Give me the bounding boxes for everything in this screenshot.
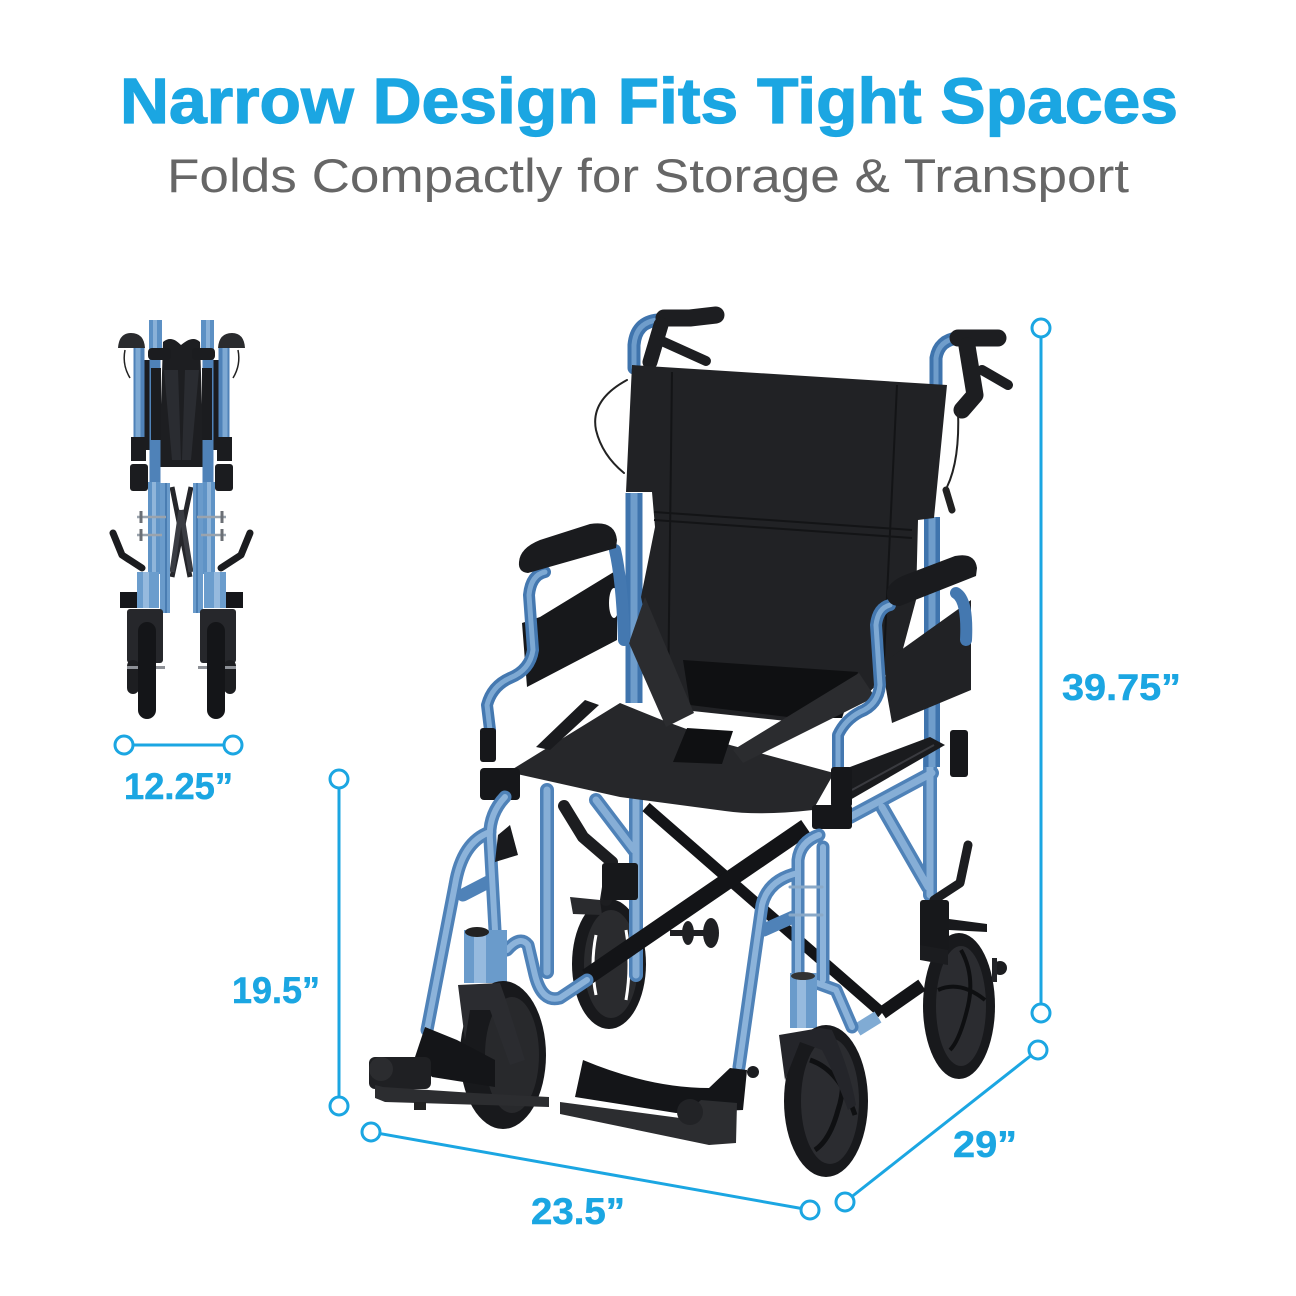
right front frame xyxy=(739,835,852,1067)
buckle xyxy=(673,728,733,764)
right brake lever xyxy=(920,845,987,965)
rear and mid frame tubes xyxy=(547,760,932,975)
subtitle: Folds Compactly for Storage & Transport xyxy=(167,149,1129,202)
dimension: width 23.5: 23.5” xyxy=(531,1191,625,1232)
rear posts under the backrest xyxy=(634,493,932,767)
wheelchair photo xyxy=(369,315,1008,1177)
rear left wheel xyxy=(572,899,646,1029)
dimension: folded width 12.25 xyxy=(115,736,242,807)
folded chair: right half xyxy=(192,320,250,719)
folded wheelchair photo xyxy=(113,320,250,719)
right footrest xyxy=(560,1060,759,1145)
arm tubes xyxy=(487,550,966,767)
handle: left xyxy=(595,315,716,473)
dimension: folded width 12.25: 12.25” xyxy=(124,766,233,807)
dimension: height 39.75: 39.75” xyxy=(1062,667,1181,708)
folding X cross bars xyxy=(587,807,922,1030)
right arm panel xyxy=(885,600,971,723)
folded chair: centre fabric and cross brace xyxy=(159,339,204,577)
dimension: height 39.75 xyxy=(1032,319,1181,1022)
seat xyxy=(508,700,834,813)
folded chair: left half xyxy=(113,320,171,719)
dimension: seat height 19.5: 19.5” xyxy=(232,970,320,1011)
gap below backrest xyxy=(705,713,796,735)
title: Narrow Design Fits Tight Spaces xyxy=(120,65,1178,137)
seat belt straps xyxy=(629,597,875,764)
backrest xyxy=(626,365,947,722)
front right wheel xyxy=(779,1025,868,1177)
left brake lever xyxy=(564,806,638,915)
rear right wheel xyxy=(923,933,1007,1079)
right armrest pad xyxy=(887,555,977,606)
seat brackets xyxy=(480,728,968,829)
dimension: width 23.5 xyxy=(362,1123,819,1232)
centre knobs xyxy=(670,918,719,948)
front left wheel xyxy=(458,981,546,1129)
left caster housing xyxy=(464,825,518,983)
dimension: seat height 19.5 xyxy=(232,770,348,1115)
right caster housing xyxy=(790,972,817,1028)
under-seat rail xyxy=(834,737,945,800)
left arm panel xyxy=(522,570,619,687)
handle: right xyxy=(936,338,1008,510)
dimension: depth 29: 29” xyxy=(953,1124,1017,1165)
left front frame xyxy=(427,797,587,1030)
left footrest xyxy=(369,1027,549,1110)
left armrest pad xyxy=(519,523,617,573)
dimension: depth 29 xyxy=(836,1041,1047,1211)
